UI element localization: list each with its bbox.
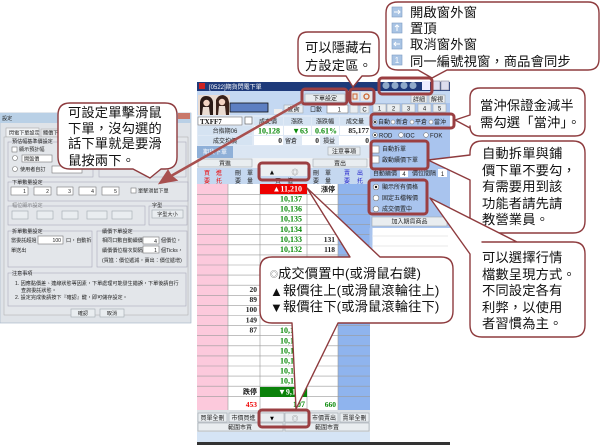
quote panel: 0 <box>365 136 369 145</box>
order tab and buy/sell buttons <box>197 146 370 168</box>
settings dialog window: (買進：價位遞減，賣出：價位遞增) <box>102 257 182 264</box>
right settings panel: ROD <box>379 134 393 140</box>
bottom market order buttons: 買單全刪 <box>200 414 225 422</box>
quote panel: 漲跌幅 <box>316 118 334 126</box>
order tab and buy/sell buttons: 賣出 <box>334 160 346 168</box>
price ladder table: 托 <box>216 177 222 185</box>
quote panel: 0.61% <box>315 126 337 136</box>
right settings panel: FOK <box>430 134 442 140</box>
price ladder table: ◎ <box>292 168 298 176</box>
price ladder table: 進 <box>216 169 222 177</box>
quote panel: 漲跌 <box>291 118 303 126</box>
callout: single click order: 鼠按兩下。 <box>68 153 135 168</box>
price ladder table: 10,137 <box>280 194 302 204</box>
settings dialog window: 顯示預計幅 <box>19 146 44 153</box>
price ladder table: 107 <box>293 400 305 409</box>
callout: day trade margin <box>455 88 585 136</box>
callout: price ladder display modes: 可以選擇行情 <box>482 250 562 265</box>
settings dialog window: 1. 因應黏價差、連線狀態等因素，下單處理可能發生錯誤，下單後請自行 <box>15 280 179 287</box>
callout: price centering and scrolling: ▲ <box>270 284 283 299</box>
callout: price ladder display modes <box>430 198 585 337</box>
quote panel: 台指期06 <box>213 127 238 135</box>
settings dialog window: 續價下單設定 <box>102 228 133 235</box>
bottom market order buttons: 範圍市賣 <box>315 424 339 432</box>
quote panel: 成交均價 <box>213 137 237 145</box>
quote panel: ▼63 <box>292 126 308 136</box>
toolbar and trader photos: 查詢 <box>287 106 300 114</box>
price ladder table: 要 <box>344 178 350 185</box>
quote panel: TXFF7 <box>200 118 222 126</box>
price ladder table: ▲ <box>269 170 275 176</box>
settings dialog window: 4 <box>91 189 94 195</box>
price ladder table: 10,1 <box>280 356 294 366</box>
price ladder table: 10,1 <box>280 376 294 386</box>
settings dialog window: 單擊滑鼠下單 <box>138 188 169 194</box>
callout: auto split and price orders: 教營業員。 <box>482 212 549 227</box>
settings dialog window: 閃電下單設定 <box>9 130 40 136</box>
callout: price ladder display modes: 不同設定各有 <box>482 283 562 298</box>
right settings panel: 成交價置中 <box>382 205 412 213</box>
settings dialog window: 字型 <box>152 202 162 209</box>
callout: auto split and price orders: 自動拆單與鋪 <box>482 146 562 161</box>
right settings panel: 新倉 <box>396 118 408 126</box>
quote panel: 85,177 <box>348 126 369 135</box>
price ladder table: 值 <box>287 177 293 185</box>
window control icons: 解視 <box>431 96 443 104</box>
price ladder table: 10,132 <box>280 245 302 254</box>
arrow to single-click checkbox <box>160 101 303 183</box>
price ladder table: 660 <box>325 400 336 409</box>
callout: hide right settings: 可以隱藏右 <box>305 40 372 55</box>
settings dialog window: 1 <box>154 248 157 254</box>
price ladder table: 買 <box>275 178 281 185</box>
quote panel: 留倉 <box>285 137 297 145</box>
price ladder table: 100 <box>246 305 257 314</box>
callout: auto split and price orders: 功能者請先請 <box>482 196 562 211</box>
price ladder table <box>197 165 370 410</box>
settings dialog window: 100 <box>52 238 61 244</box>
settings dialog window: 4 <box>154 239 157 245</box>
price ladder table: 10,1 <box>280 346 294 356</box>
right settings panel: 價位間隔 <box>412 170 436 178</box>
settings dialog window: 開盤價 <box>24 156 39 162</box>
toolbar and trader photos <box>197 91 450 116</box>
price ladder table: ▼9,1 <box>278 388 296 396</box>
callout: window functions: 同一編號視窗，商品會同步 <box>410 54 571 69</box>
settings dialog window: 單送出 <box>11 247 26 254</box>
right settings panel: 自動 <box>378 118 390 126</box>
price ladder table: 131 <box>324 235 335 244</box>
callout: day trade margin: 需勾選「當沖」。 <box>480 115 581 130</box>
callout: auto split and price orders: 價下單不要勾， <box>482 163 576 178</box>
price ladder table: 要 <box>235 178 241 185</box>
quote panel: 10,128 <box>258 126 280 136</box>
bottom market order buttons: ▼ <box>269 416 275 422</box>
settings dialog window: 個Ticks， <box>161 247 183 254</box>
settings dialog window: 取消 <box>107 310 117 317</box>
toolbar and trader photos: 1 <box>338 108 342 114</box>
callout: window functions <box>386 2 599 78</box>
icon: cancel external window <box>392 39 402 49</box>
right settings panel: IOC <box>404 134 415 140</box>
right settings panel: 自動拆單 <box>382 145 406 153</box>
price ladder table: 跌停 <box>243 387 257 396</box>
settings dialog window: 相同口數自動續價 <box>102 237 143 244</box>
price ladder table: 149 <box>246 316 257 324</box>
right settings panel: 4 <box>402 172 406 178</box>
callout: day trade margin: 當沖保證金減半 <box>480 97 574 113</box>
price ladder table: ▲11,210 <box>273 184 302 194</box>
settings dialog window: 下單數量設定 <box>12 179 43 186</box>
right settings panel: 平倉 <box>415 118 427 126</box>
price ladder table: 賣 <box>344 169 350 177</box>
settings dialog window: 使用者自訂 <box>20 166 45 173</box>
icon: pin on top <box>392 23 402 33</box>
price ladder table: 10,1 <box>280 326 294 335</box>
price ladder table: 10,134 <box>280 225 302 234</box>
title bar: [0522]期貨閃電下單 <box>209 83 262 91</box>
callout: single click order: 可設定單擊滑鼠 <box>68 104 162 120</box>
price ladder table: 要 <box>204 178 210 185</box>
settings dialog window: 3 <box>68 189 71 195</box>
price ladder table: 453 <box>246 400 257 409</box>
right settings panel: 2 <box>392 106 396 112</box>
price ladder table: 10,1 <box>280 336 294 346</box>
right settings panel: 1 <box>378 106 382 112</box>
title bar <box>197 82 450 91</box>
price ladder table: 量 <box>325 178 331 185</box>
icon: window number <box>392 55 402 65</box>
order tab and buy/sell buttons: 買進 <box>219 160 231 168</box>
callout: price centering and scrolling: 報價往下(或滑鼠滾輪往下) <box>283 298 439 314</box>
settings dialog window: 字型大小 <box>157 211 178 218</box>
bottom market order buttons: ◎ <box>292 414 299 422</box>
icon: window number: 1 <box>395 56 400 65</box>
toolbar and trader photos: 口數 <box>310 106 322 114</box>
toolbar and trader photos: 下單設定 <box>313 94 337 102</box>
main order window <box>197 81 450 445</box>
price ladder table: 刪 <box>235 169 241 177</box>
toolbar and trader photos: C <box>362 108 367 114</box>
settings dialog window: 5 <box>114 189 117 195</box>
right settings panel: 1 <box>441 172 445 178</box>
settings dialog window: 續價價位檔次間隔 <box>102 247 143 254</box>
right settings panel: 啟動續價下單 <box>382 156 418 164</box>
price ladder table: 買 <box>204 170 210 177</box>
settings dialog window: 設定 <box>2 115 12 122</box>
quote panel: 損益 <box>323 137 335 145</box>
callout: single click order: 話下單就是要滑 <box>68 135 162 151</box>
bottom market order buttons: 範圍市買 <box>228 424 252 432</box>
bottom market order buttons: 市價買進 <box>231 414 256 422</box>
settings dialog window: 2 <box>46 189 49 195</box>
settings dialog window: 查詢委託狀態。 <box>21 287 57 294</box>
window control icons <box>382 81 449 104</box>
callout: price centering and scrolling: ◎ <box>270 270 278 279</box>
settings dialog window: 預估幅基準價設定 <box>12 138 53 145</box>
settings dialog window: 當委託超過 <box>11 237 36 244</box>
window control icons: 詳細 <box>413 96 425 104</box>
price ladder table: 89 <box>250 295 257 304</box>
callout: price centering and scrolling <box>260 188 453 409</box>
callout: price centering and scrolling: 報價往上(或滑鼠滾輪往上) <box>283 282 439 298</box>
order tab and buy/sell buttons: 注意事項 <box>332 148 356 156</box>
right settings panel: 顯示所有價格 <box>382 183 418 191</box>
quote panel: 0 <box>278 136 282 145</box>
settings dialog window: 1 <box>23 189 26 195</box>
quote panel: 成交價 <box>259 118 277 126</box>
quote panel: 0 <box>315 136 319 145</box>
price ladder table: 托 <box>357 177 363 185</box>
price ladder table: 漲停 <box>321 184 335 194</box>
right settings panel <box>370 103 450 442</box>
icon: open external window <box>392 7 402 17</box>
price ladder table: 單 <box>325 170 331 177</box>
price ladder table: 量 <box>247 178 253 185</box>
price ladder table: 出 <box>357 169 363 177</box>
callout: single click order <box>58 103 177 178</box>
bottom market order buttons <box>197 410 450 445</box>
callout: window functions: 置頂 <box>410 21 437 36</box>
settings dialog window: 拆單數量設定 <box>12 228 43 235</box>
quote panel <box>197 115 370 146</box>
settings dialog window: 確認 <box>78 310 88 317</box>
right settings panel: 加入期貨商品 <box>391 218 428 226</box>
callout: hide right settings: 方設定區。 <box>305 58 372 73</box>
settings dialog window: 幅位顯示設定 <box>12 202 43 209</box>
settings dialog window: 2. 設定完成後請按下『確認』鍵，即可儲存設定。 <box>15 294 128 301</box>
price ladder table: 單 <box>247 170 253 177</box>
right settings panel: 當沖 <box>434 118 446 126</box>
price ladder table: 10,136 <box>280 204 302 214</box>
callout: window functions: 取消窗外窗 <box>410 37 477 52</box>
callout: single click order: 下單，沒勾選的 <box>68 120 162 136</box>
callout: price ladder display modes: 檔數呈現方式。 <box>482 267 576 282</box>
right settings panel: 5 <box>438 106 442 112</box>
price ladder table: 要 <box>313 178 319 185</box>
callout: price centering and scrolling: 成交價置中(或滑鼠右鍵) <box>278 265 421 281</box>
price ladder table: 20 <box>250 285 257 294</box>
callout: price ladder display modes: 者習慣為主。 <box>482 316 562 331</box>
quote panel: 成交量 <box>346 118 364 126</box>
price ladder table: 刪 <box>313 169 319 177</box>
callout: price centering and scrolling: ▼ <box>270 300 283 315</box>
callout: window functions: 開啟窗外窗 <box>410 5 477 20</box>
price ladder table: 10,135 <box>280 214 302 224</box>
bottom market order buttons: 賣單全刪 <box>342 414 367 422</box>
settings dialog window: 個價位， <box>161 237 181 244</box>
callout: auto split and price orders: 有需要用到該 <box>482 179 562 194</box>
right settings panel: 3 <box>407 106 411 112</box>
callout: auto split and price orders <box>428 141 585 233</box>
right settings panel: 4 <box>423 106 427 112</box>
settings dialog window <box>0 113 191 323</box>
settings dialog window: 口，自動拆 <box>66 237 91 244</box>
price ladder table: 10,133 <box>280 235 302 244</box>
order tab and buy/sell buttons: 期貨下單 <box>203 148 227 156</box>
callout: price ladder display modes: 利弊，以使用 <box>482 299 562 315</box>
price ladder table: 87 <box>250 326 257 334</box>
settings dialog window: 觸價下 <box>43 130 58 136</box>
highlight boxes <box>259 78 454 427</box>
price ladder table: 10,1 <box>280 366 294 376</box>
right settings panel: 固定五檔報價 <box>382 194 418 202</box>
callout: hide right settings <box>298 32 379 87</box>
price ladder table: 118 <box>324 245 335 254</box>
right settings panel: 自動續價 <box>373 170 397 178</box>
settings dialog window: 注意事項 <box>12 270 32 277</box>
bottom market order buttons: 市價賣出 <box>312 414 336 422</box>
